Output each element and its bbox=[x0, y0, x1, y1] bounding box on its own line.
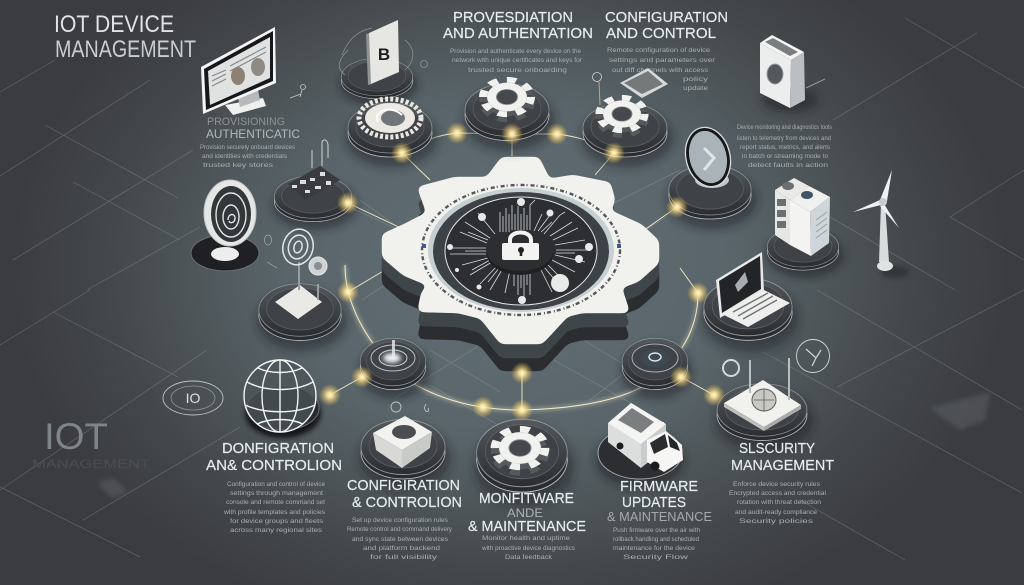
text block: left bottom configuration bbox=[206, 440, 342, 534]
text block: configuration and control: CONFIGURATION bbox=[605, 9, 728, 26]
text block: right middle bbox=[737, 124, 833, 169]
text block: monitoring and maintenance: ANDE bbox=[507, 506, 543, 520]
icon: padlock bbox=[502, 232, 539, 260]
text block: right middle: detect faults in action bbox=[748, 162, 828, 169]
node: flower gear disc bbox=[346, 99, 438, 167]
text block: configuration and control: policy bbox=[683, 76, 709, 83]
text block: left authentication: trusted key stores bbox=[203, 162, 274, 169]
node: antenna disc with signal rings bbox=[257, 226, 347, 351]
text block: monitoring and maintenance: & MAINTENANCE bbox=[468, 518, 586, 535]
text block: firmware updates and maintenance: Security Flow bbox=[623, 554, 688, 561]
icon: monitor bbox=[201, 27, 276, 115]
text block: right middle: Device monitoring and diagnostics tools bbox=[737, 124, 833, 131]
text block: configuration and control: Remote configuration of device bbox=[607, 47, 710, 54]
text block: firmware updates and maintenance: maintenance for the device bbox=[613, 545, 695, 552]
text block: provisioning and authentication: PROVESDIATION bbox=[453, 9, 573, 26]
text block: left authentication: Provision securely onboard devices bbox=[200, 144, 296, 151]
node: delivery truck on disc bbox=[596, 403, 684, 487]
text block: left bottom configuration: across many regional sites bbox=[230, 527, 323, 534]
text block: firmware updates and maintenance: Push firmware over the air with bbox=[613, 527, 700, 534]
text block: left bottom configuration: settings through management bbox=[230, 490, 323, 497]
node: book on disc bbox=[339, 20, 428, 106]
icon: server box bbox=[760, 35, 825, 112]
node: book on disc: B bbox=[378, 45, 390, 64]
text block: provisioning and authentication: Provision and authenticate every device on the bbox=[450, 48, 581, 55]
smudge marks bbox=[97, 392, 990, 498]
glowing connection nodes bbox=[319, 122, 725, 421]
node: right mid disc bbox=[621, 338, 692, 399]
text block: left authentication: and identities with credentials bbox=[202, 153, 288, 160]
text block: configuration and control bottom bbox=[347, 477, 462, 561]
text block: firmware updates and maintenance bbox=[607, 478, 712, 561]
text block: provisioning and authentication: network with unique certificates and keys for bbox=[452, 57, 583, 64]
text block: security management: and audit-ready compliance bbox=[735, 509, 817, 516]
circuit traces bbox=[450, 200, 590, 298]
text block: configuration and control bottom: Set up device configuration rules bbox=[352, 517, 449, 524]
text block: right middle: listen to telemetry from devices and bbox=[737, 135, 831, 142]
title: IOT DEVICE bbox=[54, 11, 174, 38]
text block: security management: Enforce device security rules bbox=[733, 481, 821, 488]
icon: IO ring badge bbox=[163, 381, 223, 415]
central gear with padlock bbox=[385, 160, 656, 368]
node: left mid disc bbox=[359, 338, 430, 399]
icon: IO ring badge: IO bbox=[186, 390, 200, 406]
text block: left authentication: PROVISIONING bbox=[207, 116, 285, 128]
text block: configuration and control bottom: and sync state between devices bbox=[352, 536, 449, 543]
text block: monitoring and maintenance: Monitor health and uptime bbox=[482, 535, 570, 542]
text block: firmware updates and maintenance: rollback handling and scheduled bbox=[613, 536, 699, 543]
text block: firmware updates and maintenance: UPDATES bbox=[622, 494, 686, 511]
text block: configuration and control bbox=[605, 9, 728, 92]
text block: left bottom configuration: DONFIGRATION bbox=[222, 440, 334, 457]
icon: chip tile bbox=[592, 68, 668, 105]
text block: configuration and control: out diff channels with access bbox=[612, 67, 709, 74]
title bbox=[54, 11, 196, 63]
text block: left bottom configuration: AN& CONTROLION bbox=[206, 457, 342, 474]
node: magnifier lens disc bbox=[667, 123, 757, 229]
node: laptop disc bbox=[702, 252, 798, 352]
text block: firmware updates and maintenance: FIRMWARE bbox=[620, 478, 698, 495]
text block: firmware updates and maintenance: & MAINTENANCE bbox=[607, 509, 712, 524]
text block: right middle: report status, metrics, and alerts bbox=[740, 144, 831, 151]
text block: provisioning and authentication: trusted secure onboarding bbox=[468, 67, 567, 74]
text block: monitoring and maintenance bbox=[468, 490, 586, 561]
text block: configuration and control bottom: for full visibility bbox=[370, 554, 438, 561]
text block: left authentication bbox=[200, 116, 300, 169]
icon: wind turbine bbox=[853, 170, 909, 278]
faded watermark: IoT bbox=[32, 416, 151, 471]
text block: left bottom configuration: with profile templates and policies bbox=[223, 509, 326, 516]
text block: configuration and control bottom: & CONTROLION bbox=[352, 494, 462, 511]
text block: configuration and control: AND CONTROL bbox=[606, 25, 716, 42]
text block: monitoring and maintenance: Data feedback bbox=[505, 554, 553, 561]
node: paired server units bbox=[766, 178, 844, 278]
text block: security management: SLSCURITY bbox=[739, 440, 815, 457]
text block: left bottom configuration: console and remote command set bbox=[226, 499, 325, 506]
node: gear disc top right bbox=[581, 98, 673, 167]
text block: configuration and control bottom: CONFIGIRATION bbox=[347, 477, 460, 494]
text block: provisioning and authentication bbox=[443, 9, 593, 74]
text block: security management: Encrypted access and credential bbox=[729, 490, 827, 497]
faded watermark: IoT: IOT bbox=[44, 416, 108, 457]
text block: security management: rotation with threat detection bbox=[737, 499, 821, 506]
node: gear disc bottom bbox=[474, 419, 574, 506]
text block: right middle: in batch or streaming mode to bbox=[742, 153, 828, 160]
text block: monitoring and maintenance: MONFITWARE bbox=[479, 490, 574, 507]
faded watermark: IoT: MANAGEMENT bbox=[32, 457, 151, 471]
node: circuit board disc bbox=[273, 140, 357, 230]
text block: left bottom configuration: Configuration and control of device bbox=[227, 481, 325, 488]
node: wireframe globe bbox=[244, 360, 321, 438]
node: cube disc bbox=[359, 402, 451, 490]
text block: configuration and control bottom: and platform backend bbox=[363, 545, 440, 552]
node: security compass plate bbox=[715, 340, 830, 451]
node: fingerprint lens bbox=[191, 180, 259, 271]
node: gear disc top centre bbox=[463, 80, 555, 151]
icon: small node glyph near monitor bbox=[290, 84, 306, 98]
text block: configuration and control: settings and parameters over bbox=[609, 57, 716, 64]
text block: left authentication: AUTHENTICATIC bbox=[206, 127, 300, 141]
text block: security management bbox=[729, 440, 834, 525]
text block: provisioning and authentication: AND AUTHENTATION bbox=[443, 25, 593, 42]
text block: security management: Security policies bbox=[739, 518, 814, 525]
text block: monitoring and maintenance: with proactive device diagnostics bbox=[481, 545, 576, 552]
title: MANAGEMENT bbox=[55, 36, 196, 63]
text block: left bottom configuration: for device groups and fleets bbox=[230, 518, 324, 525]
text block: configuration and control: update bbox=[683, 85, 708, 92]
text block: security management: MANAGEMENT bbox=[731, 457, 834, 474]
text block: configuration and control bottom: Remote control and command delivery bbox=[347, 526, 453, 533]
network arcs and connectors bbox=[326, 133, 714, 410]
